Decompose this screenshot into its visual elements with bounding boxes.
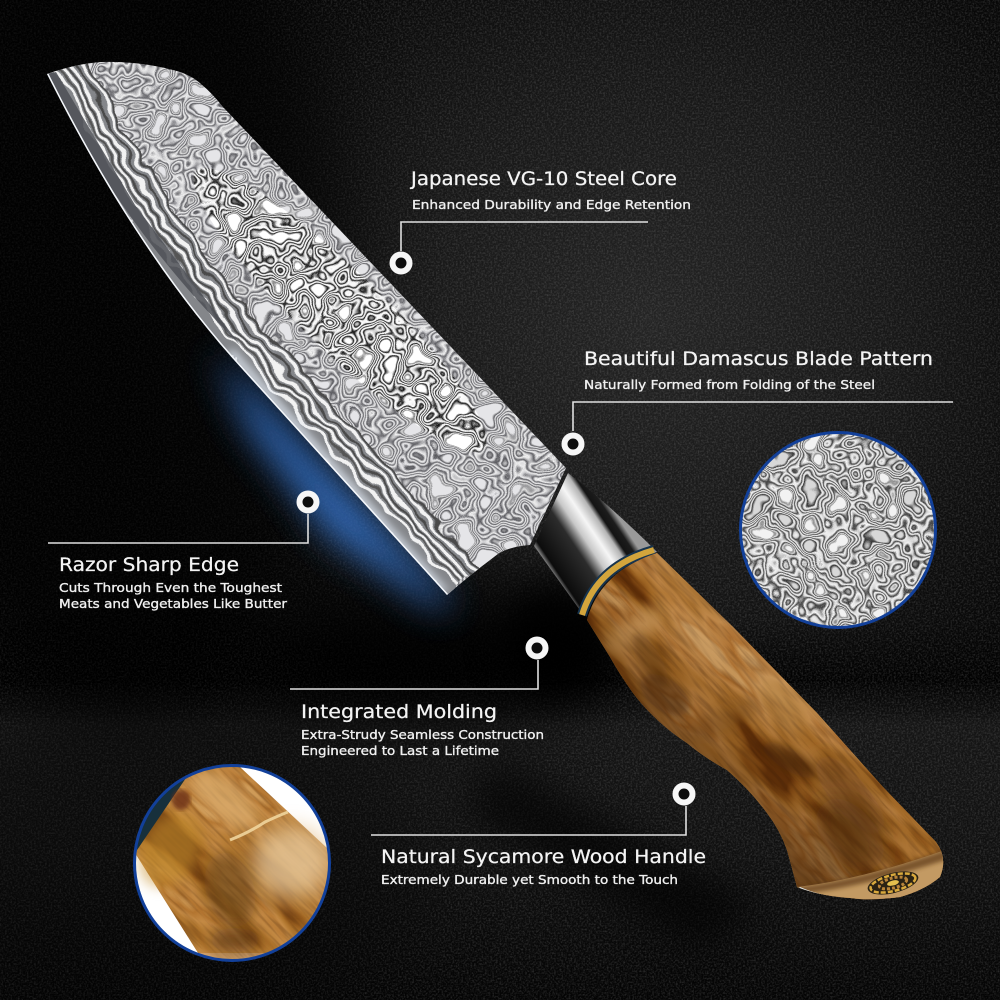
description: Enhanced Durability and Edge Retention xyxy=(412,197,691,212)
leader line xyxy=(573,402,953,431)
wavy edge lamination xyxy=(57,48,480,587)
callout: Beautiful Damascus Blade Pattern xyxy=(564,348,953,452)
blue edge glow xyxy=(215,350,452,610)
marker xyxy=(676,786,692,802)
wooden handle xyxy=(587,553,944,900)
leader line xyxy=(401,222,648,251)
heading: Beautiful Damascus Blade Pattern xyxy=(584,348,933,370)
leader line xyxy=(371,806,686,835)
heading: Natural Sycamore Wood Handle xyxy=(381,846,706,868)
marker xyxy=(564,436,582,452)
leader line xyxy=(290,660,538,689)
mosaic pin xyxy=(865,867,921,899)
callout: Natural Sycamore Wood Handle xyxy=(371,786,706,887)
callout: Japanese VG-10 Steel Core xyxy=(392,168,691,272)
marker xyxy=(528,640,546,656)
callout: Integrated Molding xyxy=(290,640,546,758)
inset: damascus close-up xyxy=(738,430,938,630)
description: Extra-Strudy Seamless Construction xyxy=(301,727,544,742)
marker xyxy=(392,254,410,272)
description: Extremely Durable yet Smooth to the Touch xyxy=(381,872,678,887)
heading: Japanese VG-10 Steel Core xyxy=(410,168,677,190)
blade xyxy=(47,62,566,595)
bolster xyxy=(534,473,657,613)
heading: Razor Sharp Edge xyxy=(59,554,239,576)
description: Naturally Formed from Folding of the Steel xyxy=(584,377,875,392)
marker xyxy=(300,494,316,510)
brass ring xyxy=(582,550,654,615)
inset: wood close-up xyxy=(133,764,331,962)
heading: Integrated Molding xyxy=(301,701,497,723)
callout: Razor Sharp Edge xyxy=(48,494,316,611)
description: Meats and Vegetables Like Butter xyxy=(59,596,288,611)
leader line xyxy=(48,514,308,543)
description: Engineered to Last a Lifetime xyxy=(301,743,499,758)
description: Cuts Through Even the Toughest xyxy=(59,580,282,595)
